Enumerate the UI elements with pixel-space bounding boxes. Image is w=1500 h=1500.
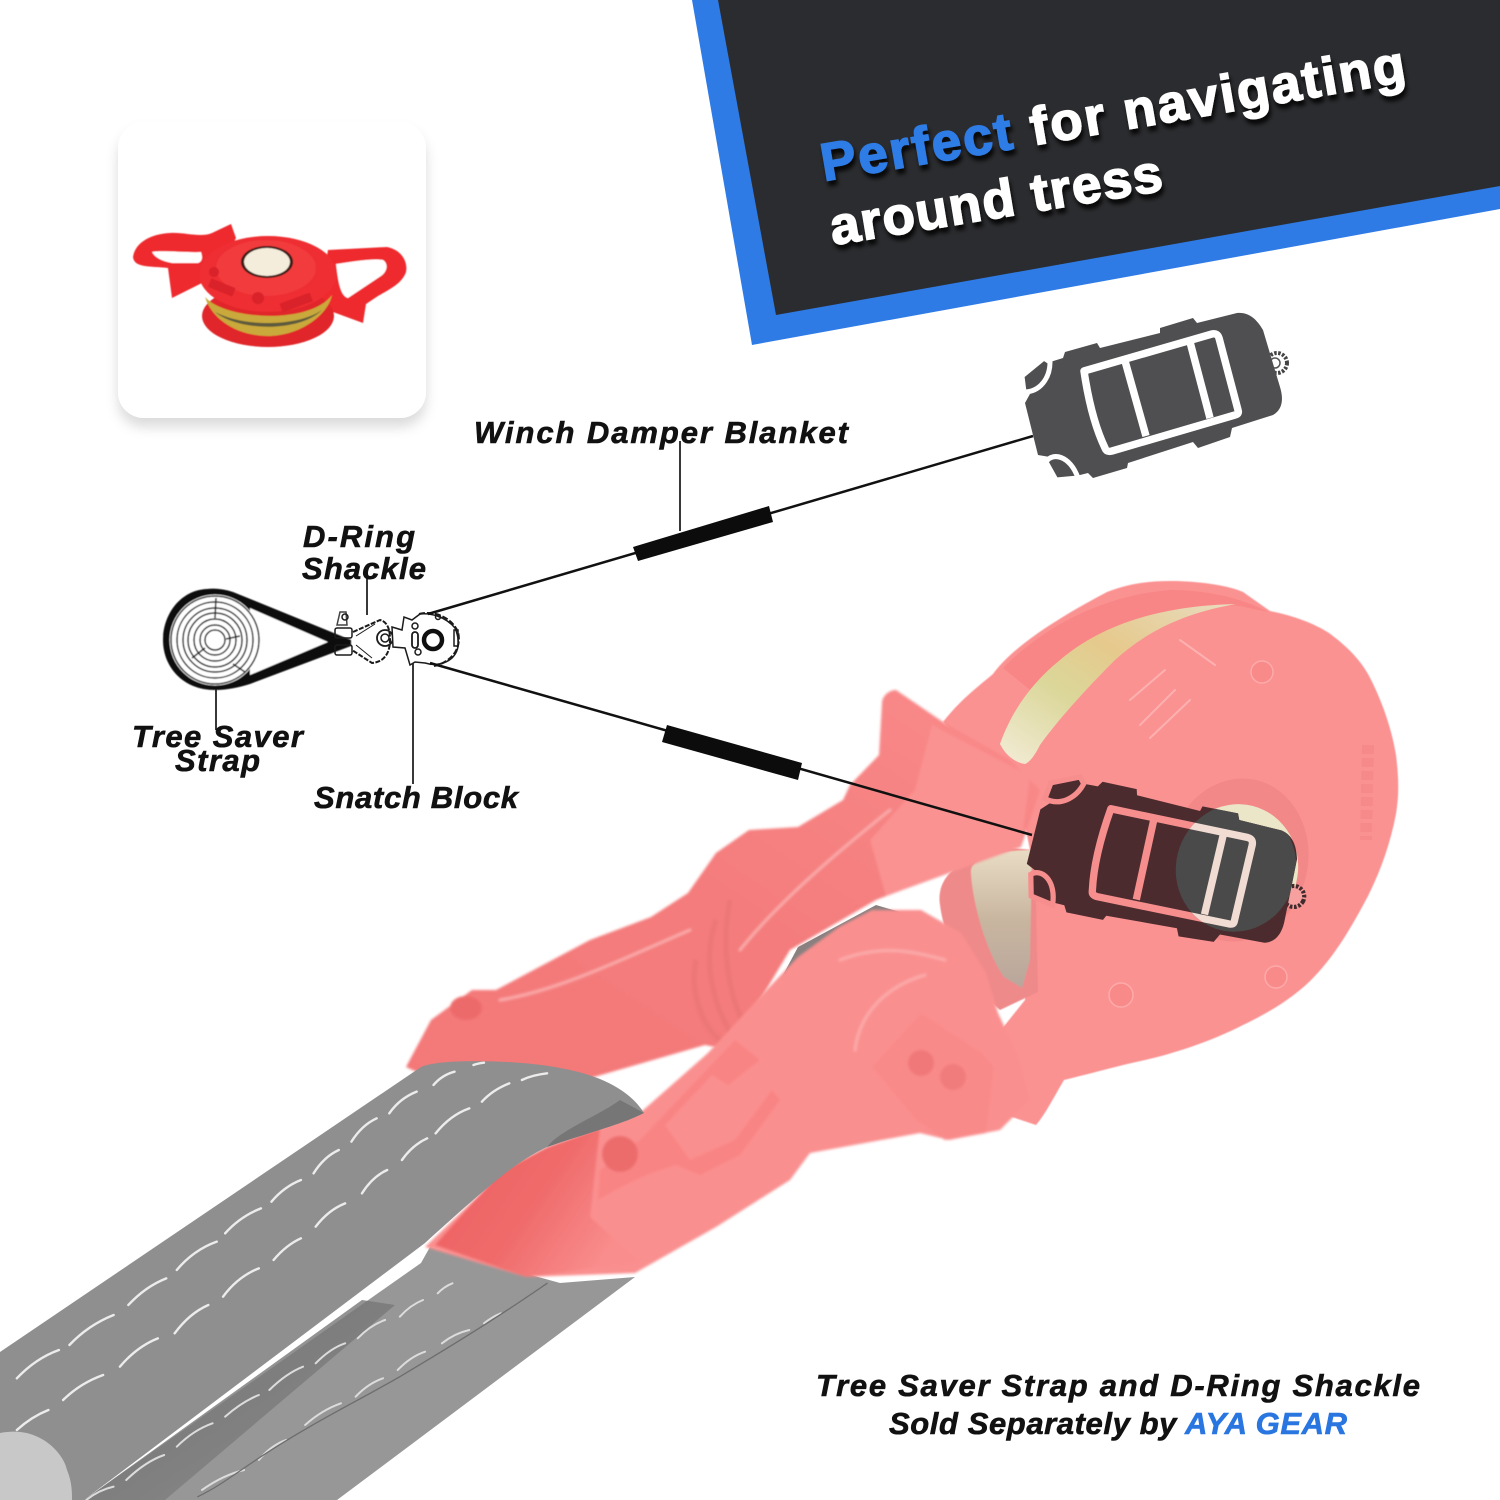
strap fold shadow	[547, 1100, 644, 1147]
hub recess	[1152, 765, 1324, 955]
arm highlight	[500, 810, 890, 1000]
stitching rows	[17, 1063, 547, 1500]
callout: Winch Damper Blanket: Winch Damper Blanket	[474, 415, 850, 450]
car portion over bearing	[1176, 808, 1296, 932]
photo: front webbing strap	[0, 1061, 644, 1500]
photo: snatch block pulley body	[943, 581, 1398, 1125]
arm bolt	[450, 996, 482, 1020]
embossed capacity marks	[1366, 745, 1368, 840]
callout: D-Ring Shackle: Shackle	[302, 551, 426, 586]
wire: upper winch line with damper	[428, 436, 1033, 614]
callout: D-Ring Shackle: D-Ring	[303, 519, 415, 554]
icon: upper vehicle top view	[1022, 313, 1287, 480]
plate bolts	[1109, 661, 1287, 1007]
photo: lower sheave window	[939, 848, 1038, 1010]
callout: Snatch Block: Snatch Block	[314, 780, 520, 815]
hook bolt	[602, 1136, 638, 1172]
thumbnail card: product photo of snatch block	[118, 122, 426, 418]
photo: D-ring shackle upper arm	[406, 690, 1040, 1110]
diagram: snatch block line art	[392, 613, 459, 666]
wire: lower winch line with damper	[430, 663, 1032, 835]
hook shaded underside	[435, 1128, 640, 1277]
diagram: D-ring shackle line art	[335, 612, 393, 663]
footnote text	[816, 1368, 1420, 1441]
plate raised panel	[1130, 640, 1215, 738]
footnote text: Sold Separately by AYA GEAR	[889, 1406, 1348, 1441]
flange highlight	[870, 725, 1030, 896]
callout: Tree Saver Strap	[132, 689, 305, 778]
heading text: Perfect for navigating	[816, 35, 1410, 193]
heading text: around tress	[825, 144, 1166, 257]
rope end	[0, 1432, 72, 1500]
callout: Tree Saver Strap: Strap	[175, 743, 260, 778]
collar ridges	[694, 900, 745, 1042]
gold sheave crescent	[1000, 604, 1236, 764]
banner: dark tilted heading panel with blue border	[692, 0, 1500, 345]
photo: D-ring shackle lower arm	[425, 910, 1030, 1277]
callout: Tree Saver Strap: Tree Saver	[132, 719, 305, 754]
icon: red snatch block	[133, 224, 406, 347]
footnote text: Tree Saver Strap and D-Ring Shackle	[816, 1368, 1420, 1403]
pin collar arcs	[840, 951, 945, 1050]
hook pad	[598, 1040, 780, 1200]
shackle pin diamond	[872, 1013, 994, 1140]
callout: D-Ring Shackle	[302, 519, 426, 615]
car silhouette over photo	[1000, 724, 1328, 1010]
hub bearing	[1162, 791, 1312, 945]
icon: lower vehicle top view	[1026, 780, 1306, 943]
diagram: tree with tree saver strap	[163, 589, 351, 690]
photo: dark strap shadow behind shackle	[775, 905, 900, 990]
pulley back rim highlight	[1003, 590, 1268, 690]
photo: rear webbing strap	[84, 1247, 635, 1500]
